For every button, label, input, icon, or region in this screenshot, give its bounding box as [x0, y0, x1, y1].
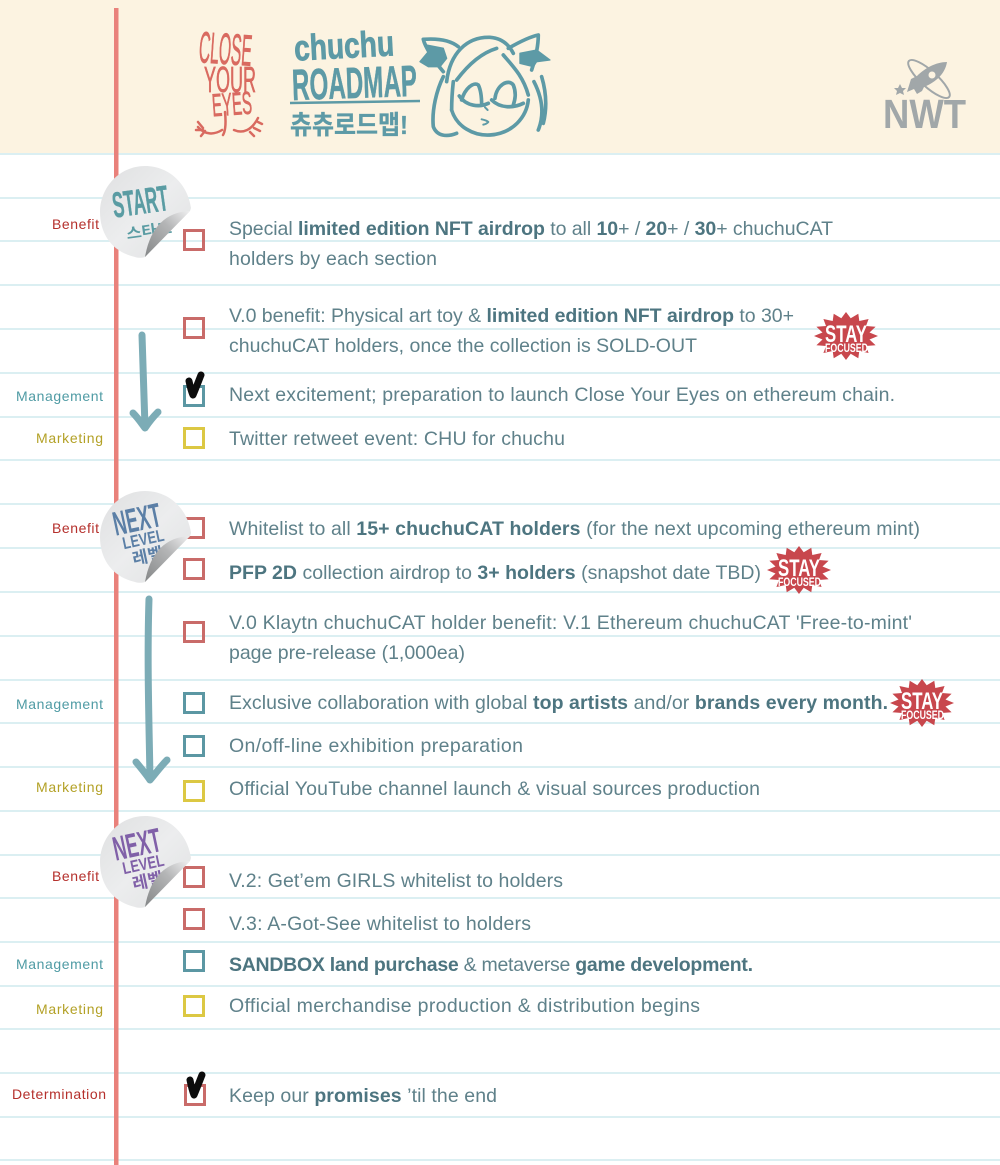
- checkbox: red: [186, 1086, 204, 1104]
- header band: [0, 0, 1000, 153]
- stamp: Stay Focused: [814, 312, 878, 360]
- item text: Whitelist to all 15+ chuchuCAT holders (for the next upcoming ethereum mint): [229, 518, 920, 540]
- item text: Official merchandise production & distribution begins: [229, 995, 700, 1017]
- label: Benefit: Benefit: [52, 520, 99, 536]
- checkbox: red: [184, 622, 204, 642]
- arrow: second section: [136, 599, 167, 780]
- logo: Close Your Eyes: EYES: [211, 85, 253, 123]
- item text: Special limited edition NFT airdrop to all 10+ / 20+ / 30+ chuchuCAT: [229, 218, 833, 240]
- label: Marketing: Marketing: [36, 1001, 103, 1017]
- sticker: START: [100, 166, 191, 258]
- sticker: START: 스타트: [125, 220, 173, 243]
- checkbox: teal: [184, 952, 204, 970]
- sticker: START: START: [110, 177, 171, 226]
- roadmap items: [229, 218, 920, 1107]
- item text: V.0 benefit: Physical art toy & limited edition NFT airdrop to 30+: [229, 305, 794, 327]
- label: Benefit: Benefit: [52, 216, 99, 232]
- stamp: Stay Focused: FOCUSED: [825, 341, 868, 355]
- item text: V.2: Get’em GIRLS whitelist to holders: [229, 870, 563, 892]
- checkboxes: [184, 230, 204, 1104]
- sticker: NEXT LEVEL purple: [100, 816, 191, 908]
- label: Marketing: Marketing: [36, 430, 103, 446]
- stamp: Stay Focused: [890, 679, 954, 727]
- logo: NWT rocket: [883, 55, 966, 137]
- label: Benefit: Benefit: [52, 868, 99, 884]
- sticker: NEXT LEVEL blue: NEXT: [110, 496, 165, 544]
- checkbox: teal: [184, 386, 204, 406]
- item text: Official YouTube channel launch & visual sources production: [229, 778, 760, 800]
- item text: PFP 2D collection airdrop to 3+ holders (snapshot date TBD): [229, 562, 761, 584]
- label: Management: Management: [16, 388, 103, 404]
- sticker: NEXT LEVEL purple: 레벨: [131, 869, 165, 894]
- checkbox: red: [184, 560, 204, 578]
- arrow: first section: [133, 335, 158, 428]
- stamp: Stay Focused: FOCUSED: [778, 575, 821, 589]
- checkbox: yellow: [184, 782, 204, 800]
- NWT wordmark: NWT: [883, 91, 966, 137]
- item text: Next excitement; preparation to launch Close Your Eyes on ethereum chain.: [229, 384, 895, 406]
- checkbox: teal: [184, 694, 204, 712]
- illustration: cat-eared girl: [420, 35, 550, 135]
- item text: page pre-release (1,000ea): [229, 642, 465, 664]
- checkbox: red: [184, 868, 204, 886]
- Korean title lettering: 츄츄로드맵!: [290, 110, 408, 140]
- checkbox: yellow: [184, 996, 204, 1016]
- checkbox: teal: [184, 736, 204, 756]
- checkbox: red: [184, 318, 204, 338]
- stamp: Stay Focused: FOCUSED: [901, 708, 944, 722]
- item text: Exclusive collaboration with global top artists and/or brands every month.: [229, 692, 888, 714]
- logo: chuchu ROADMAP: [290, 22, 420, 140]
- item text: Keep our promises ’til the end: [229, 1085, 497, 1107]
- text: CLOSE: [197, 23, 254, 76]
- sticker: NEXT LEVEL purple: NEXT: [110, 821, 165, 869]
- icon: check mark: [190, 1075, 202, 1095]
- label: Determination: Determination: [12, 1086, 106, 1102]
- logo: Close Your Eyes: [196, 23, 262, 136]
- checkbox: yellow: [184, 428, 204, 448]
- sticker: NEXT LEVEL blue: [100, 491, 191, 583]
- label: Management: Management: [16, 696, 103, 712]
- stamp: Stay Focused: [767, 546, 831, 594]
- checkbox: red: [184, 230, 204, 250]
- icon: check mark: [189, 375, 201, 395]
- checkbox: red: [184, 910, 204, 928]
- item text: SANDBOX land purchase & metaverse game development.: [229, 954, 753, 976]
- icon: rocket: [894, 55, 954, 103]
- ROADMAP lettering: ROADMAP: [291, 57, 418, 110]
- item text: chuchuCAT holders, once the collection is SOLD-OUT: [229, 335, 697, 357]
- stamp: Stay Focused: STAY: [825, 321, 867, 348]
- category labels: [12, 216, 106, 1102]
- sticker: NEXT LEVEL purple: LEVEL: [121, 851, 166, 878]
- label: Management: Management: [16, 956, 103, 972]
- sticker: NEXT LEVEL blue: LEVEL: [121, 526, 166, 553]
- item text: V.0 Klaytn chuchuCAT holder benefit: V.1 Ethereum chuchuCAT 'Free-to-mint': [229, 612, 912, 634]
- label: Marketing: Marketing: [36, 779, 103, 795]
- sticker: NEXT LEVEL blue: 레벨: [131, 544, 165, 569]
- item text: V.3: A-Got-See whitelist to holders: [229, 913, 531, 935]
- stamp: Stay Focused: STAY: [901, 688, 943, 715]
- margin line: [114, 8, 118, 1165]
- stamp: Stay Focused: STAY: [778, 555, 820, 582]
- item text: holders by each section: [229, 248, 437, 270]
- checkbox: red: [184, 518, 204, 538]
- item text: Twitter retweet event: CHU for chuchu: [229, 428, 565, 450]
- item text: On/off-line exhibition preparation: [229, 735, 523, 757]
- logo: Close Your Eyes: YOUR: [204, 59, 256, 100]
- chuchu lettering: chuchu: [293, 22, 395, 69]
